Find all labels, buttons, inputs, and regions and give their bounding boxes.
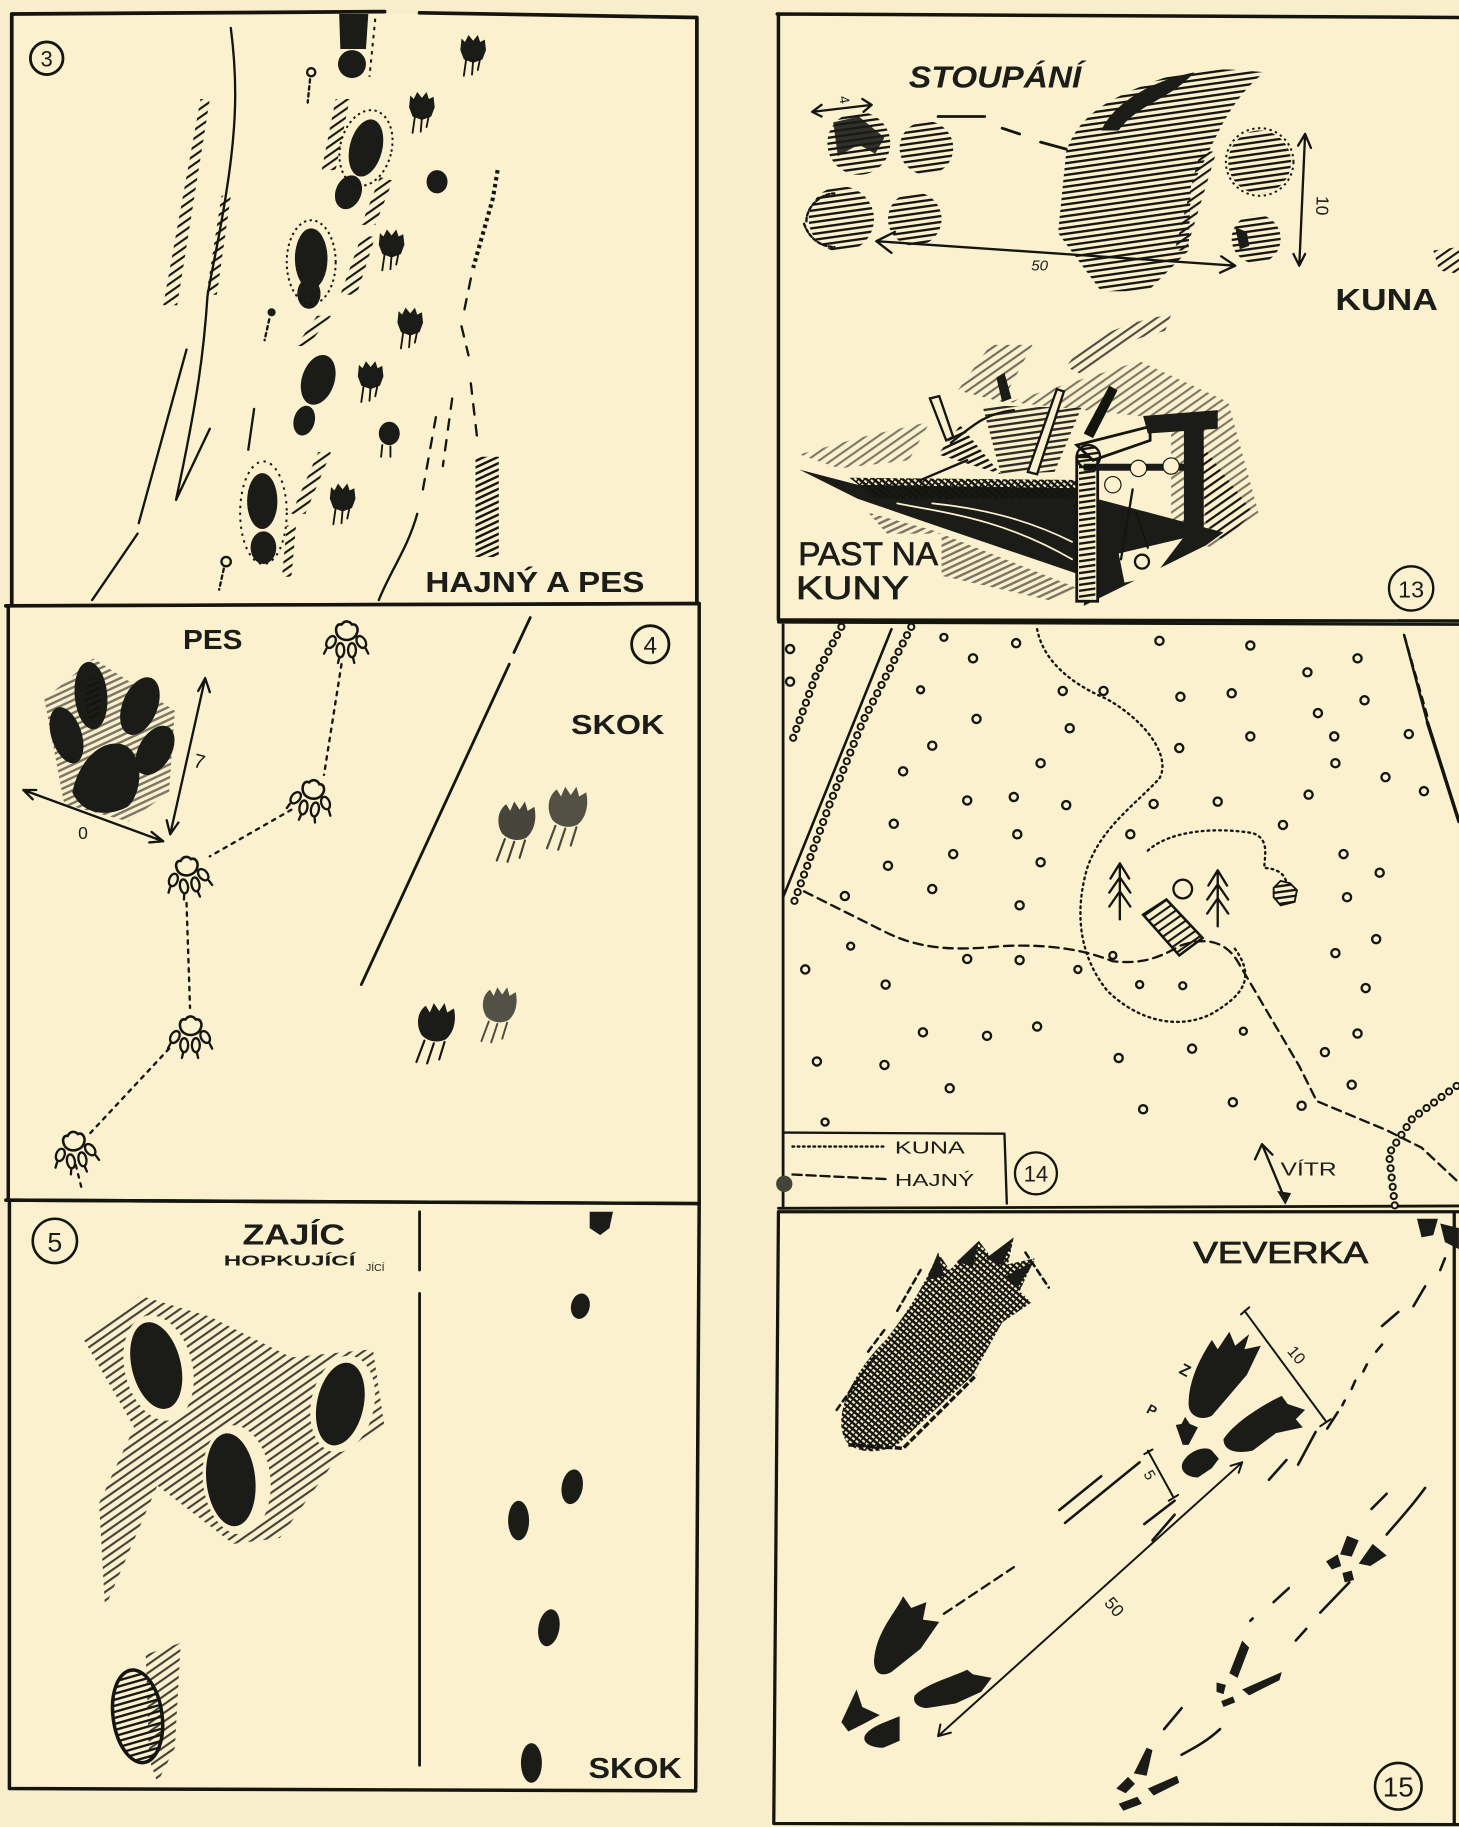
marten prints [804,112,1293,263]
measurement arrows and dashed trail [812,94,1333,274]
wind arrow and label: VÍTR [1281,1159,1337,1180]
number badge 5 [33,1219,77,1263]
heading: Zajic: ZAJÍC [242,1217,345,1251]
measurement lines: 5 [1140,1467,1159,1483]
legend box: HAJNÝ [895,1170,975,1190]
heading: Veverka: VEVERKA [1193,1237,1369,1270]
small squirrel prints with labels: P [1144,1401,1160,1419]
number badge 5: 5 [47,1227,62,1257]
hare jump prints [508,1212,613,1783]
heading: Kuna: KUNA [1335,284,1438,317]
marten dotted route [1037,629,1286,1022]
chain fences [783,627,1459,1206]
number badge 15 [1375,1763,1422,1810]
number badge 13: 13 [1398,577,1424,603]
panel 14: map of marten and gamekeeper tracks [776,622,1459,1208]
small dots with trails [219,68,315,590]
panel 5: hare [6,1200,699,1791]
heading: Skok: SKOK [571,709,664,740]
path edge lines and hatching [92,28,499,600]
edge marks at right [1433,247,1459,274]
heading: Stoupani: STOUPÁNÍ [909,60,1086,94]
large dog paw [43,658,183,821]
corner print top right [1417,1219,1459,1249]
panel 3: gamekeeper and dog [6,12,699,606]
dog paw prints [330,35,486,524]
hare feet prints [107,1308,384,1783]
jumping paw clusters [416,787,587,1063]
squirrel running track [1059,1258,1445,1811]
number badge 15: 15 [1383,1772,1414,1803]
ink dot [776,1176,792,1192]
measurement arrows and dashed trail: 50 [1031,257,1049,274]
number badge 14 [1015,1152,1057,1194]
panel 13: marten climbing and trap [777,14,1459,621]
measurement arrows and dashed trail: 4 [836,94,853,105]
number badge 4 [632,626,669,663]
paw dimension arrows: 0 [78,823,88,843]
number badge 4: 4 [643,633,657,660]
forest dots [786,634,1428,1126]
panel 4: dog [6,604,699,1204]
panel 15: squirrel [774,1212,1459,1825]
subheading: Hopkujici: HOPKUJÍCÍ [224,1252,357,1269]
number badge 3: 3 [41,46,53,71]
label: Past na kuny [792,534,942,606]
small squirrel prints with labels: Z [1176,1360,1193,1381]
paw dimension arrows: 7 [191,750,207,774]
legend box [783,1133,1007,1204]
marten trap drawing [799,315,1258,606]
measurement arrows and dashed trail: 10 [1312,196,1333,216]
heading: Hajny a pes: HAJNÝ A PES [425,565,644,599]
trees and hide [1109,863,1297,955]
measurement lines: 10 [1283,1343,1309,1368]
small squirrel prints with labels [1144,1332,1305,1477]
faded subheading fragment: JÍCÍ [366,1261,385,1274]
label: Past na kuny: KUNY [796,569,909,606]
dog track with small paws [50,621,368,1188]
boot prints [240,14,400,564]
gamekeeper dashed route [804,891,1459,1183]
heading: Skok: SKOK [589,1753,682,1785]
large squirrel foot [837,1237,1049,1451]
number badge 14: 14 [1024,1161,1048,1186]
measurement lines [938,1307,1331,1736]
heading: Pes: PES [183,624,242,655]
hare hatch shadow [84,1296,385,1608]
lower left squirrel prints [841,1567,1014,1748]
measurement lines: 50 [1100,1593,1128,1621]
legend box: KUNA [895,1138,965,1158]
diagonal line [361,618,530,985]
label: Past na kuny: PAST NA [798,535,938,572]
number badge 13 [1389,566,1433,611]
wind arrow and label [1255,1144,1337,1205]
number badge 3 [30,42,63,75]
hatched tree trunk [1058,69,1264,291]
paw dimension arrows [23,678,210,843]
